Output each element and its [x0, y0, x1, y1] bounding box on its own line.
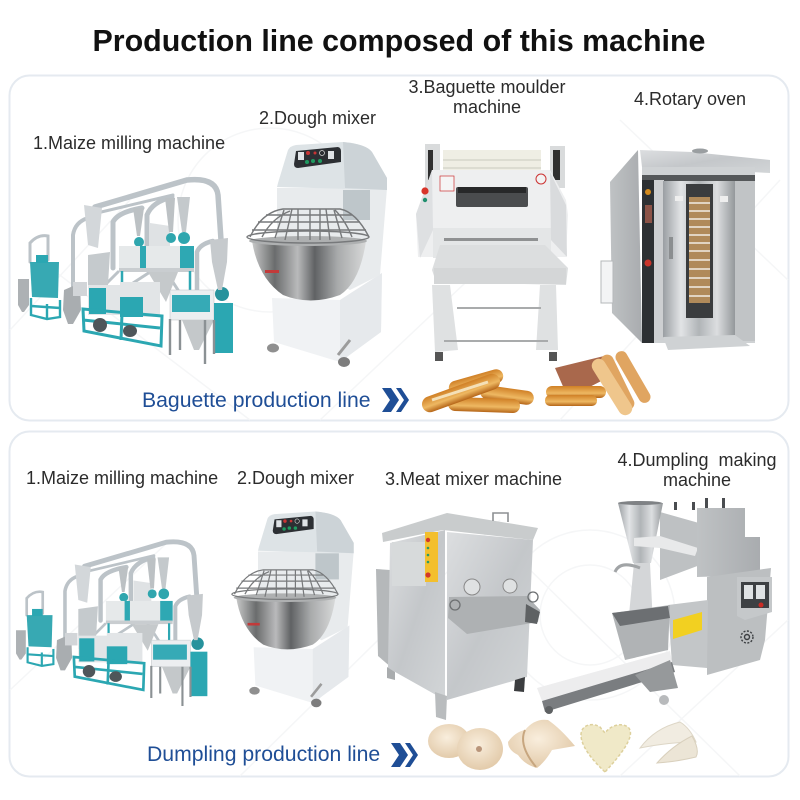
label: dumpling making machine: machine [663, 470, 731, 490]
title: Production line composed of this machine [93, 24, 705, 58]
machine: baguette moulder [416, 144, 568, 361]
label: rotary oven: 4.Rotary oven [634, 89, 746, 109]
folded dumplings [640, 722, 697, 763]
label: dumpling making machine: 4.Dumpling making [617, 450, 777, 470]
machine: maize mill [16, 542, 207, 706]
icon: chevrons [382, 388, 409, 412]
label: dough mixer: 2.Dough mixer [237, 468, 354, 488]
round dumplings [428, 724, 503, 770]
machine: dumpling maker [537, 498, 772, 714]
machine: maize mill [18, 180, 233, 364]
label: dumpling production line: Dumpling production line [147, 743, 380, 766]
label: maize milling machine: 1.Maize milling machine [26, 468, 218, 488]
baguettes in rack [545, 349, 653, 418]
label: maize milling machine: 1.Maize milling machine [33, 133, 225, 153]
icon: chevrons [391, 743, 418, 767]
panel: dumpling production line [10, 432, 788, 776]
label: dough mixer: 2.Dough mixer [259, 108, 376, 128]
machine: rotary oven [601, 148, 770, 350]
panel: baguette production line [10, 76, 788, 420]
heart dumpling [581, 725, 630, 772]
label: meat mixer machine: 3.Meat mixer machine [385, 469, 562, 489]
label: baguette moulder machine: 3.Baguette moulder [408, 77, 566, 97]
machine: meat mixer [376, 513, 540, 720]
crescent dumpling [508, 720, 575, 768]
baguettes pile [420, 368, 535, 415]
label: baguette moulder machine: machine [453, 97, 521, 117]
label: baguette production line: Baguette production line [142, 389, 371, 412]
machine: dough mixer [232, 512, 354, 707]
machine: dough mixer [247, 142, 387, 367]
dumplings [428, 720, 697, 772]
